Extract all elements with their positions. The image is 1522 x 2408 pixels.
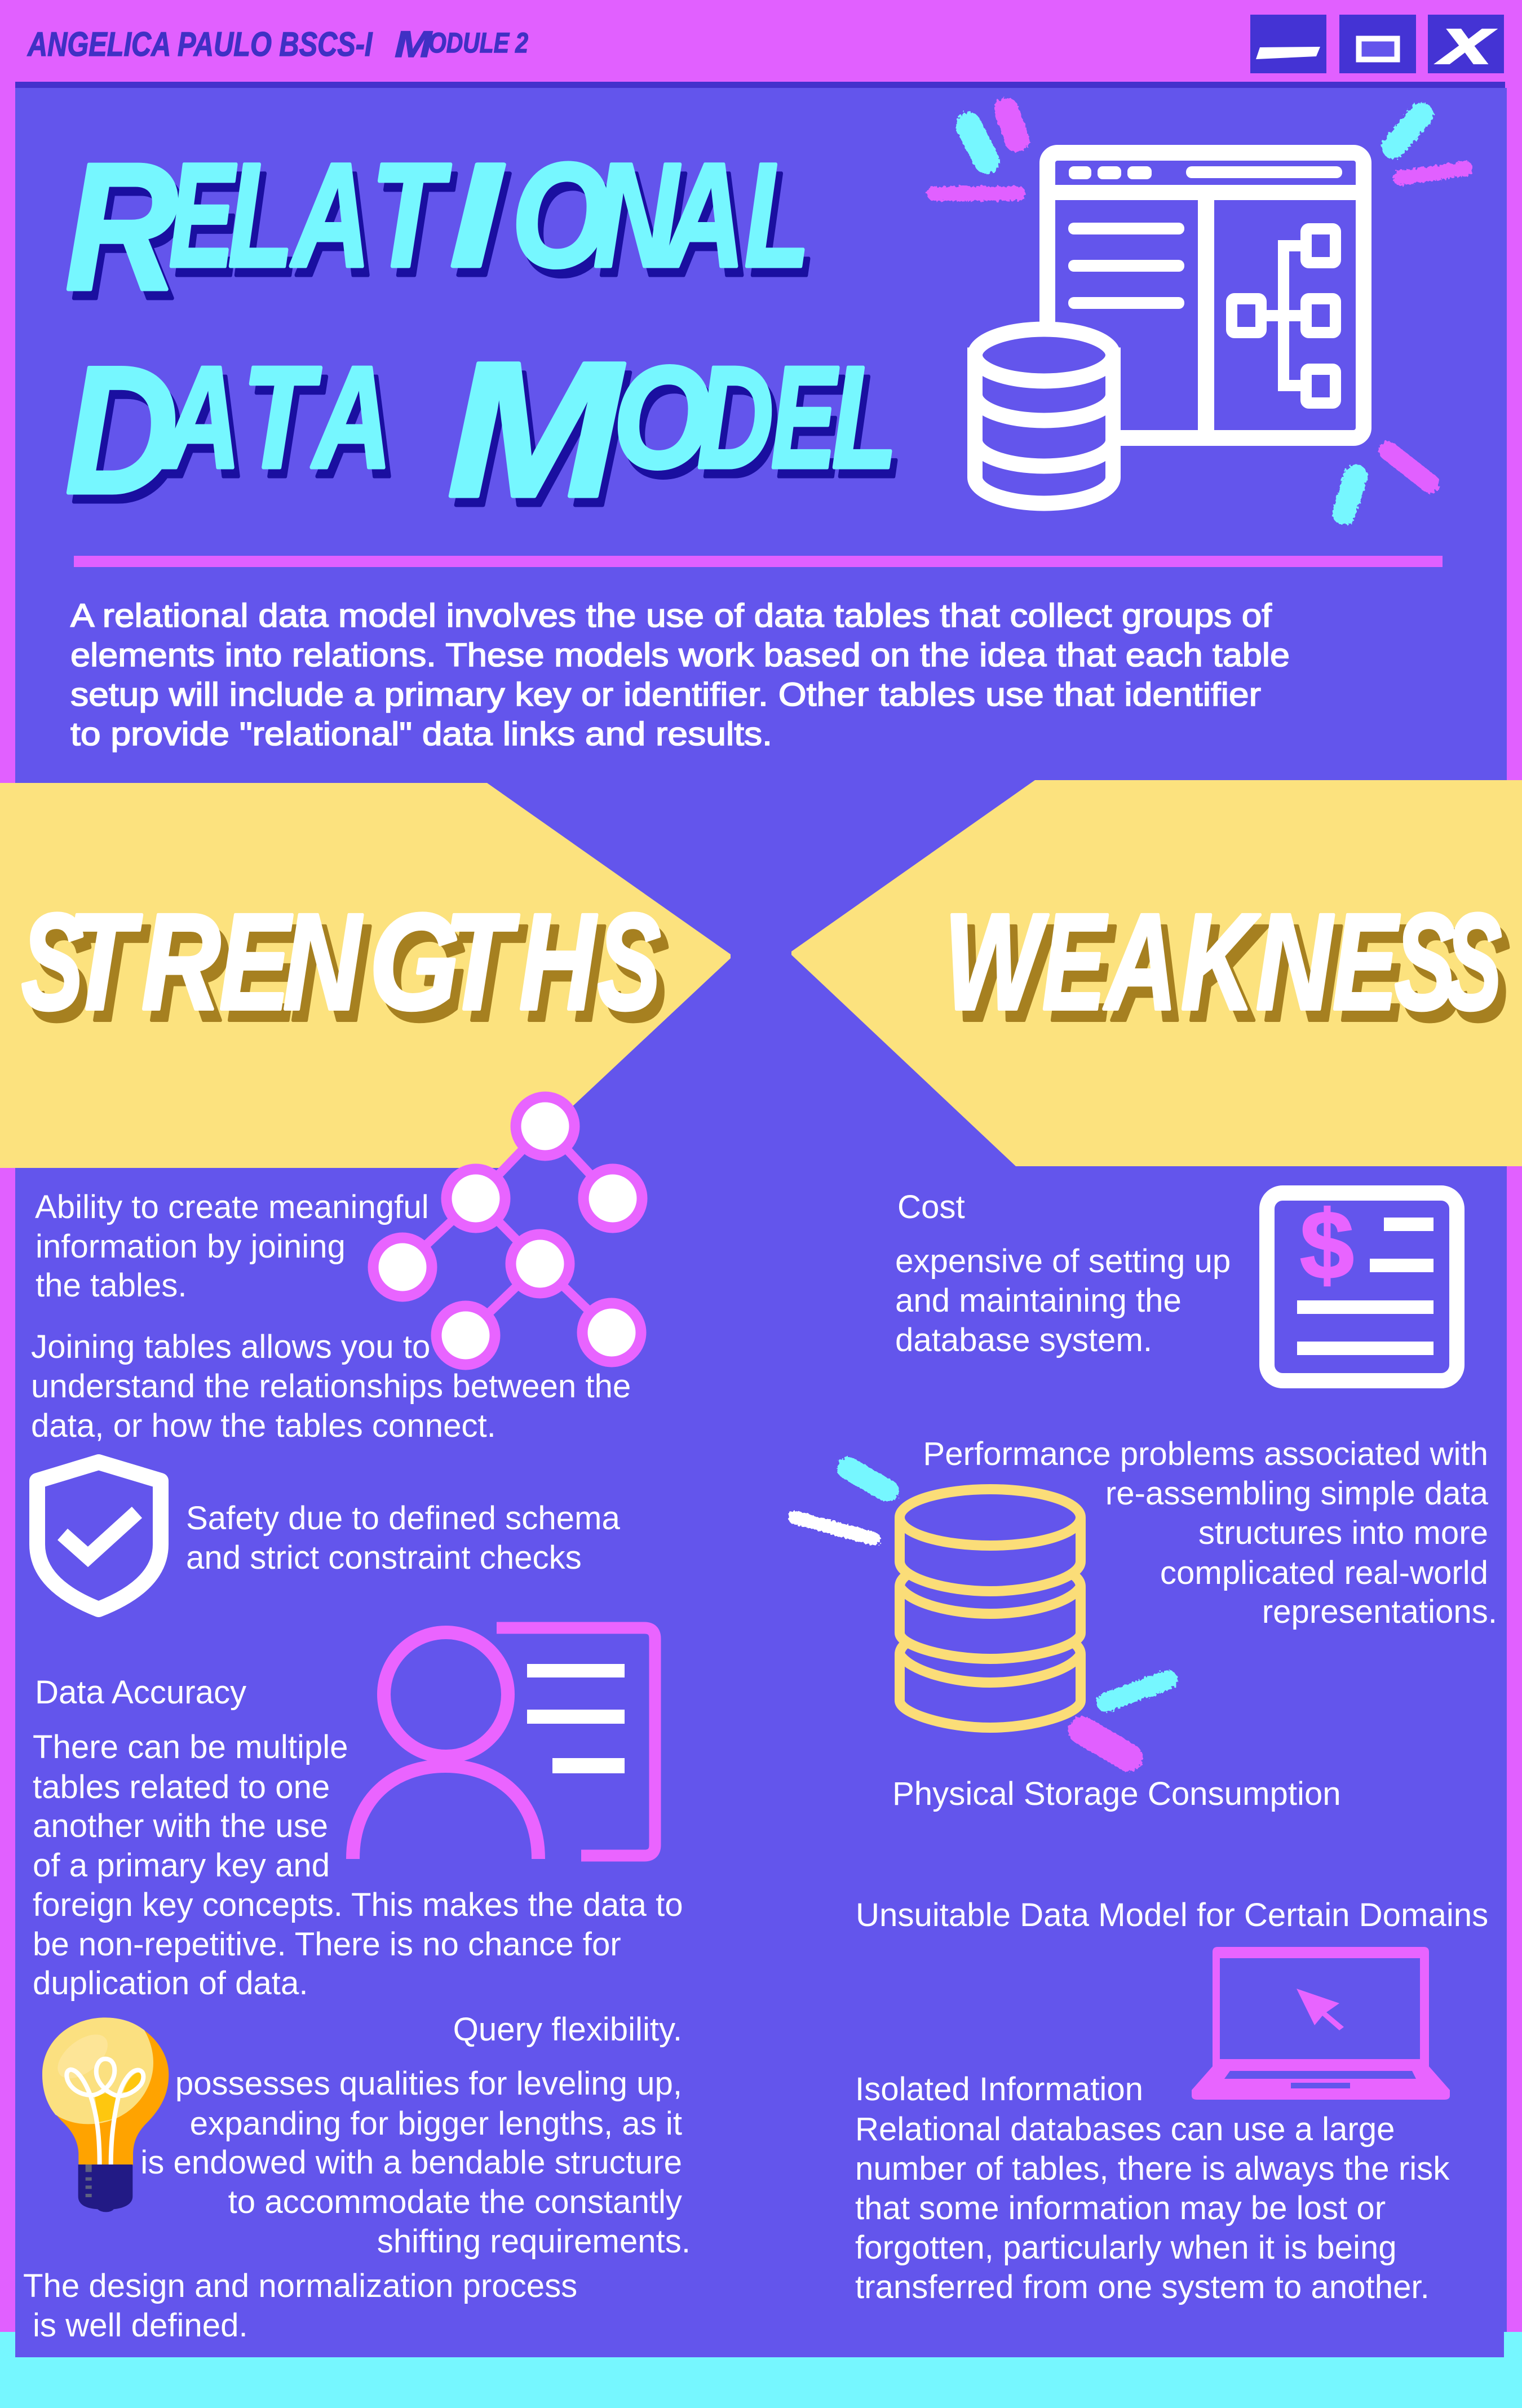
title line: Data Model: L	[832, 337, 897, 498]
icon: yellow database	[795, 1468, 1168, 1758]
title divider bar	[74, 556, 1443, 567]
heading: strengths: T	[67, 886, 142, 1038]
banner: strengths	[0, 783, 731, 1168]
heading: weakness: W	[944, 886, 1048, 1038]
text: cost body	[895, 1243, 1231, 1358]
heading: strengths: R	[141, 886, 220, 1038]
icon: price document: $	[1300, 1191, 1354, 1299]
heading: weakness: K	[1181, 886, 1260, 1038]
browser window	[1047, 153, 1364, 438]
text: joining tables: understand the relationships between the	[31, 1368, 631, 1405]
title line: Data Model: T	[242, 337, 322, 498]
title line: Relational: I	[450, 132, 504, 298]
text: performance problems: structures into more	[1198, 1515, 1488, 1551]
text: query flexibility body: to accommodate the constantly	[228, 2184, 682, 2220]
text: performance problems: Performance problems associated with	[923, 1436, 1488, 1472]
text: meaningful information	[35, 1189, 429, 1304]
text: performance problems: re-assembling simple data	[1105, 1475, 1489, 1512]
text: meaningful information: information by joining	[36, 1228, 346, 1265]
heading: strengths: N	[283, 886, 363, 1038]
title line: Data Model: D	[697, 337, 773, 498]
text: cost heading: Cost	[897, 1189, 965, 1225]
text: data accuracy body: be non-repetitive. There is no chance for	[33, 1926, 621, 1963]
text: unsuitable data model: Unsuitable Data Model for Certain Domains	[856, 1897, 1488, 1933]
title line: Relational: A	[661, 132, 745, 298]
text: isolated information body: forgotten, particularly when it is being	[855, 2229, 1397, 2266]
text: query flexibility body: possesses qualities for leveling up,	[175, 2065, 682, 2102]
text: data accuracy body: tables related to one	[33, 1769, 330, 1805]
icon: safety shield	[37, 1462, 161, 1609]
text: isolated information body: number of tables, there is always the risk	[855, 2150, 1450, 2187]
text: meaningful information: Ability to create meaningful	[35, 1189, 429, 1225]
title line: Relational: E	[169, 132, 237, 298]
intro paragraph: setup will include a primary key or identifier. Other tables use that identifier	[70, 676, 1261, 713]
title line: Relational: O	[512, 132, 609, 298]
intro paragraph: to provide "relational" data links and results.	[70, 716, 772, 753]
title line: Data Model: A	[160, 337, 241, 498]
text: cost body: expensive of setting up	[895, 1243, 1231, 1280]
banner: weakness	[791, 780, 1522, 1166]
text: isolated information heading: Isolated Information	[855, 2071, 1143, 2108]
text: cost body: database system.	[895, 1322, 1152, 1358]
title line: Relational: N	[594, 132, 682, 298]
title line: Data Model: A	[310, 337, 392, 498]
title line: Relational: R	[65, 126, 178, 328]
text: design and normalization: The design and normalization process	[23, 2268, 577, 2304]
text: performance problems: complicated real-world	[1160, 1555, 1488, 1591]
heading: weakness: S	[1395, 886, 1455, 1038]
author title bar text: M	[395, 23, 433, 65]
text: joining tables: Joining tables allows you to	[31, 1329, 430, 1365]
heading: strengths	[21, 886, 661, 1038]
icon: database and web schema window	[935, 110, 1466, 513]
cylinder	[900, 1489, 1081, 1728]
icon: light bulb	[42, 2017, 169, 2212]
intro paragraph: A relational data model involves the use of data tables that collect groups of	[70, 597, 1272, 634]
icon: price document	[1267, 1191, 1457, 1381]
text: isolated information body: Relational databases can use a large	[855, 2111, 1395, 2148]
text: design and normalization: is well defined.	[33, 2307, 248, 2344]
author title bar text: ODULE 2	[428, 27, 528, 59]
text: query flexibility body: shifting requirements.	[377, 2223, 691, 2260]
icon: tree of nodes	[373, 1097, 642, 1365]
heading: strengths: S	[598, 886, 661, 1038]
text: meaningful information: the tables.	[36, 1267, 187, 1304]
text: query flexibility body: expanding for bigger lengths, as it	[190, 2105, 682, 2142]
text: data accuracy body: There can be multiple	[33, 1729, 348, 1765]
brush accents	[795, 1468, 1168, 1758]
text: safety: and strict constraint checks	[186, 1539, 582, 1576]
title line: Relational: T	[371, 132, 452, 298]
heading: strengths: E	[219, 886, 293, 1038]
text: data accuracy heading: Data Accuracy	[35, 1674, 246, 1711]
text: physical storage: Physical Storage Consumption	[892, 1776, 1341, 1812]
intro paragraph: elements into relations. These models work based on the idea that each table	[70, 637, 1290, 674]
text: cost body: and maintaining the	[895, 1282, 1182, 1319]
text: query flexibility body	[140, 2065, 691, 2260]
text: isolated information body	[855, 2111, 1450, 2305]
author title bar text: ANGELICA PAULO BSCS-I	[26, 25, 380, 63]
title line: Data Model: M	[447, 322, 626, 537]
heading: strengths: T	[444, 886, 519, 1038]
text: design and normalization	[23, 2268, 577, 2344]
text: performance problems: representations.	[1262, 1593, 1497, 1630]
text: data accuracy body: duplication of data.	[33, 1965, 308, 2002]
title line: Relational: L	[745, 132, 809, 298]
org tree inside window	[1232, 229, 1335, 403]
maximize button	[1339, 15, 1416, 73]
heading: weakness: N	[1256, 886, 1334, 1038]
title line: Data Model: O	[613, 337, 710, 498]
text: isolated information body: transferred from one system to another.	[855, 2269, 1430, 2305]
heading: weakness: E	[1042, 886, 1108, 1038]
text: query flexibility body: is endowed with a bendable structure	[140, 2144, 682, 2181]
heading: strengths: H	[519, 886, 597, 1038]
text: data accuracy body	[33, 1729, 683, 2002]
text: joining tables: data, or how the tables connect.	[31, 1407, 496, 1444]
intro paragraph	[70, 597, 1290, 753]
title line: Relational: A	[289, 132, 370, 298]
text: performance problems	[923, 1436, 1497, 1630]
text: joining tables	[31, 1329, 631, 1444]
heading: strengths: S	[21, 886, 83, 1038]
text: safety	[186, 1500, 621, 1576]
title line: Relational: L	[228, 132, 293, 298]
heading: weakness: A	[1103, 886, 1177, 1038]
title line: Data Model: D	[65, 329, 178, 532]
minimize button	[1250, 15, 1326, 73]
text: data accuracy body: foreign key concepts. This makes the data to	[33, 1887, 683, 1923]
heading: weakness	[944, 886, 1502, 1038]
heading: weakness: E	[1333, 886, 1400, 1038]
white database cylinder	[975, 329, 1113, 503]
main title: Relational Data Model	[65, 126, 897, 537]
brush accents	[935, 110, 1466, 513]
text: query flexibility heading: Query flexibility.	[453, 2011, 682, 2048]
close button: X	[1437, 20, 1494, 74]
text: data accuracy body: another with the use	[33, 1808, 328, 1844]
icon: laptop with cursor	[1192, 1947, 1450, 2100]
text: isolated information body: that some information may be lost or	[855, 2190, 1386, 2226]
text: safety: Safety due to defined schema	[186, 1500, 621, 1537]
icon: user profile card	[353, 1628, 655, 1859]
title line: Data Model: E	[771, 337, 839, 498]
heading: strengths: G	[369, 886, 459, 1038]
close button	[1428, 15, 1504, 74]
text: data accuracy body: of a primary key and	[33, 1847, 330, 1884]
